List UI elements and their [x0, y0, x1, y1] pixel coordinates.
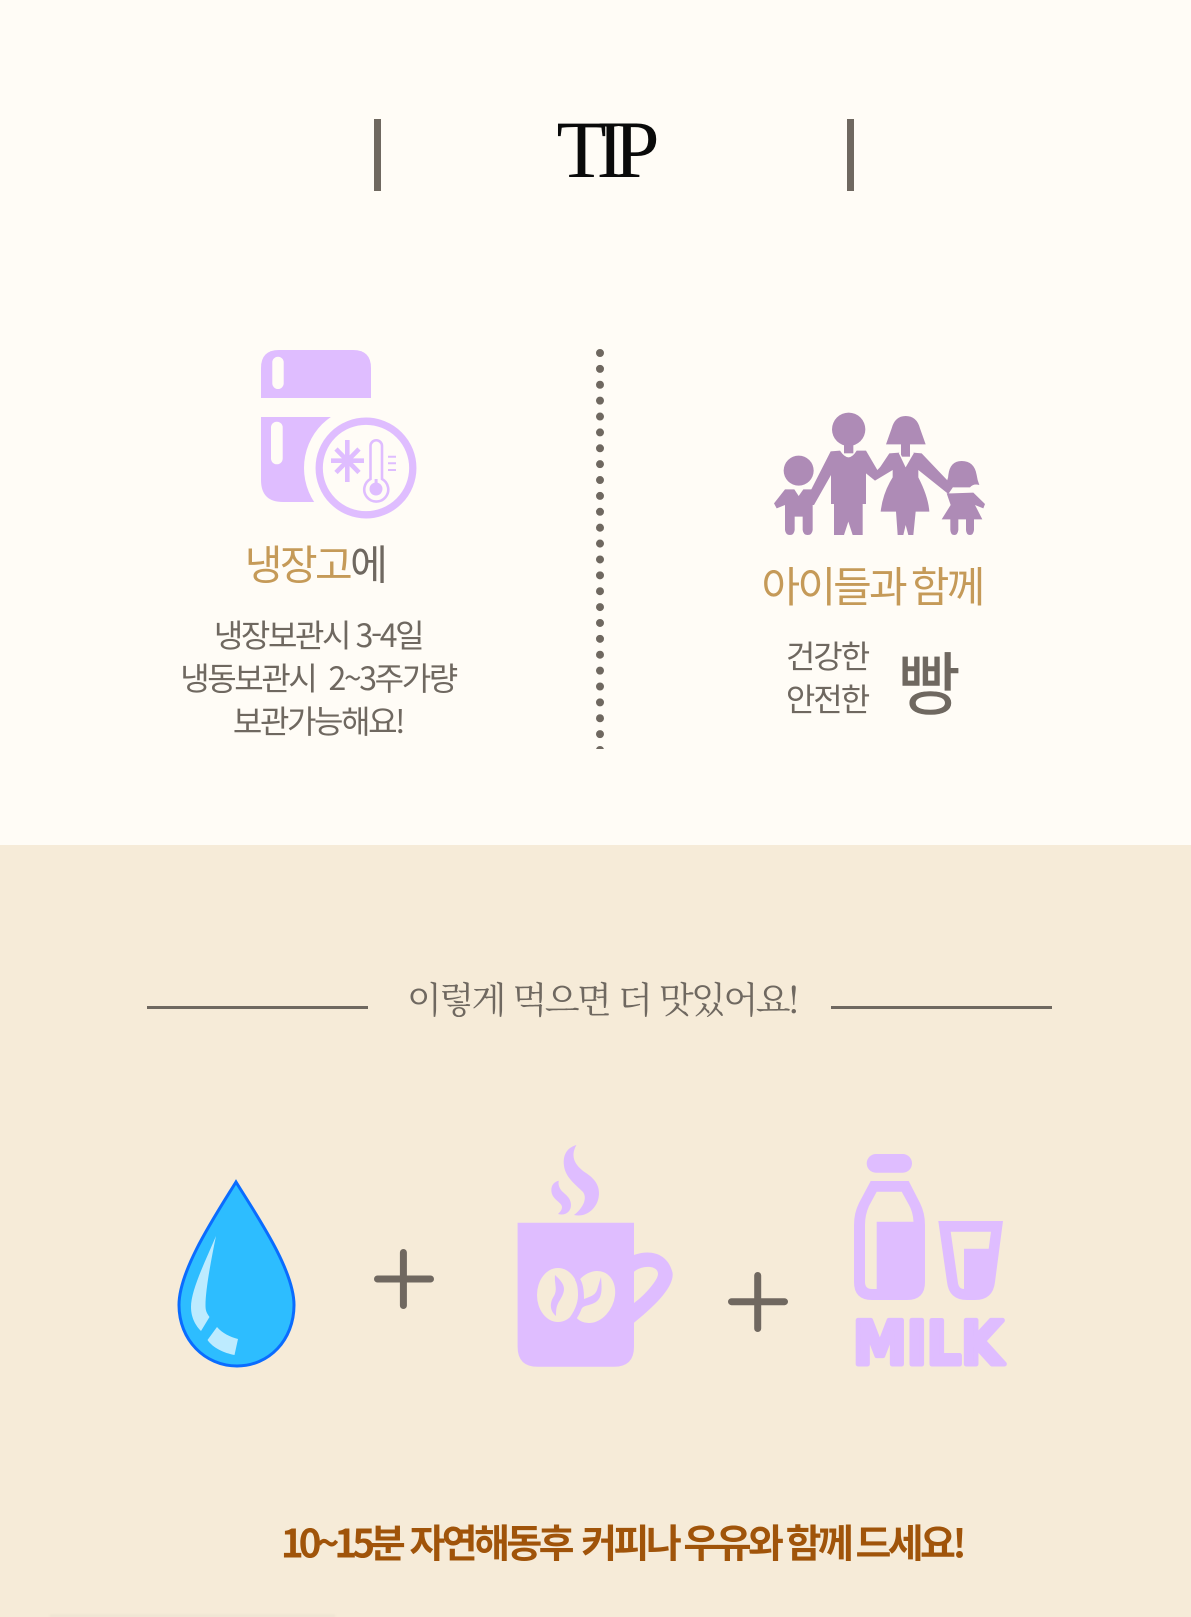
icon: family — [774, 412, 985, 535]
lower section background — [0, 845, 1191, 1617]
heading: refrigerator: 냉장고에 — [245, 531, 385, 591]
heading bar left — [374, 119, 381, 191]
heading bar right — [847, 119, 854, 191]
divider line left — [147, 1006, 368, 1009]
icon: plus — [728, 1272, 788, 1332]
text: storage guide: 냉장보관시 3-4일 — [214, 611, 422, 657]
caption: serving instructions: 10~15분 자연해동후 커피나 우유와 함께 드세요! — [281, 1514, 963, 1570]
text: bread: 빵 — [898, 630, 960, 729]
icon: plus — [374, 1249, 434, 1309]
cut-off footer text hint — [50, 1615, 335, 1617]
icon: milk bottle and glass — [853, 1154, 1007, 1375]
text: healthy and safe: 안전한 — [786, 675, 868, 721]
heading: with children: 아이들과 함께 — [761, 554, 983, 615]
icon: refrigerator with thermometer — [261, 350, 416, 518]
text: storage guide — [180, 611, 458, 743]
text: storage guide: 냉동보관시 2~3주가량 — [180, 654, 456, 700]
dotted divider — [596, 349, 604, 749]
title: TIP: TIP — [556, 104, 650, 195]
subheading: tastier this way: 이렇게 먹으면 더 맛있어요! — [407, 972, 797, 1023]
icon: water drop — [178, 1179, 296, 1368]
icon: coffee mug — [518, 1145, 673, 1367]
text: healthy and safe: 건강한 — [786, 632, 868, 678]
text: healthy and safe — [786, 632, 870, 721]
divider line right — [831, 1006, 1052, 1009]
text: storage guide: 보관가능해요! — [233, 697, 403, 743]
